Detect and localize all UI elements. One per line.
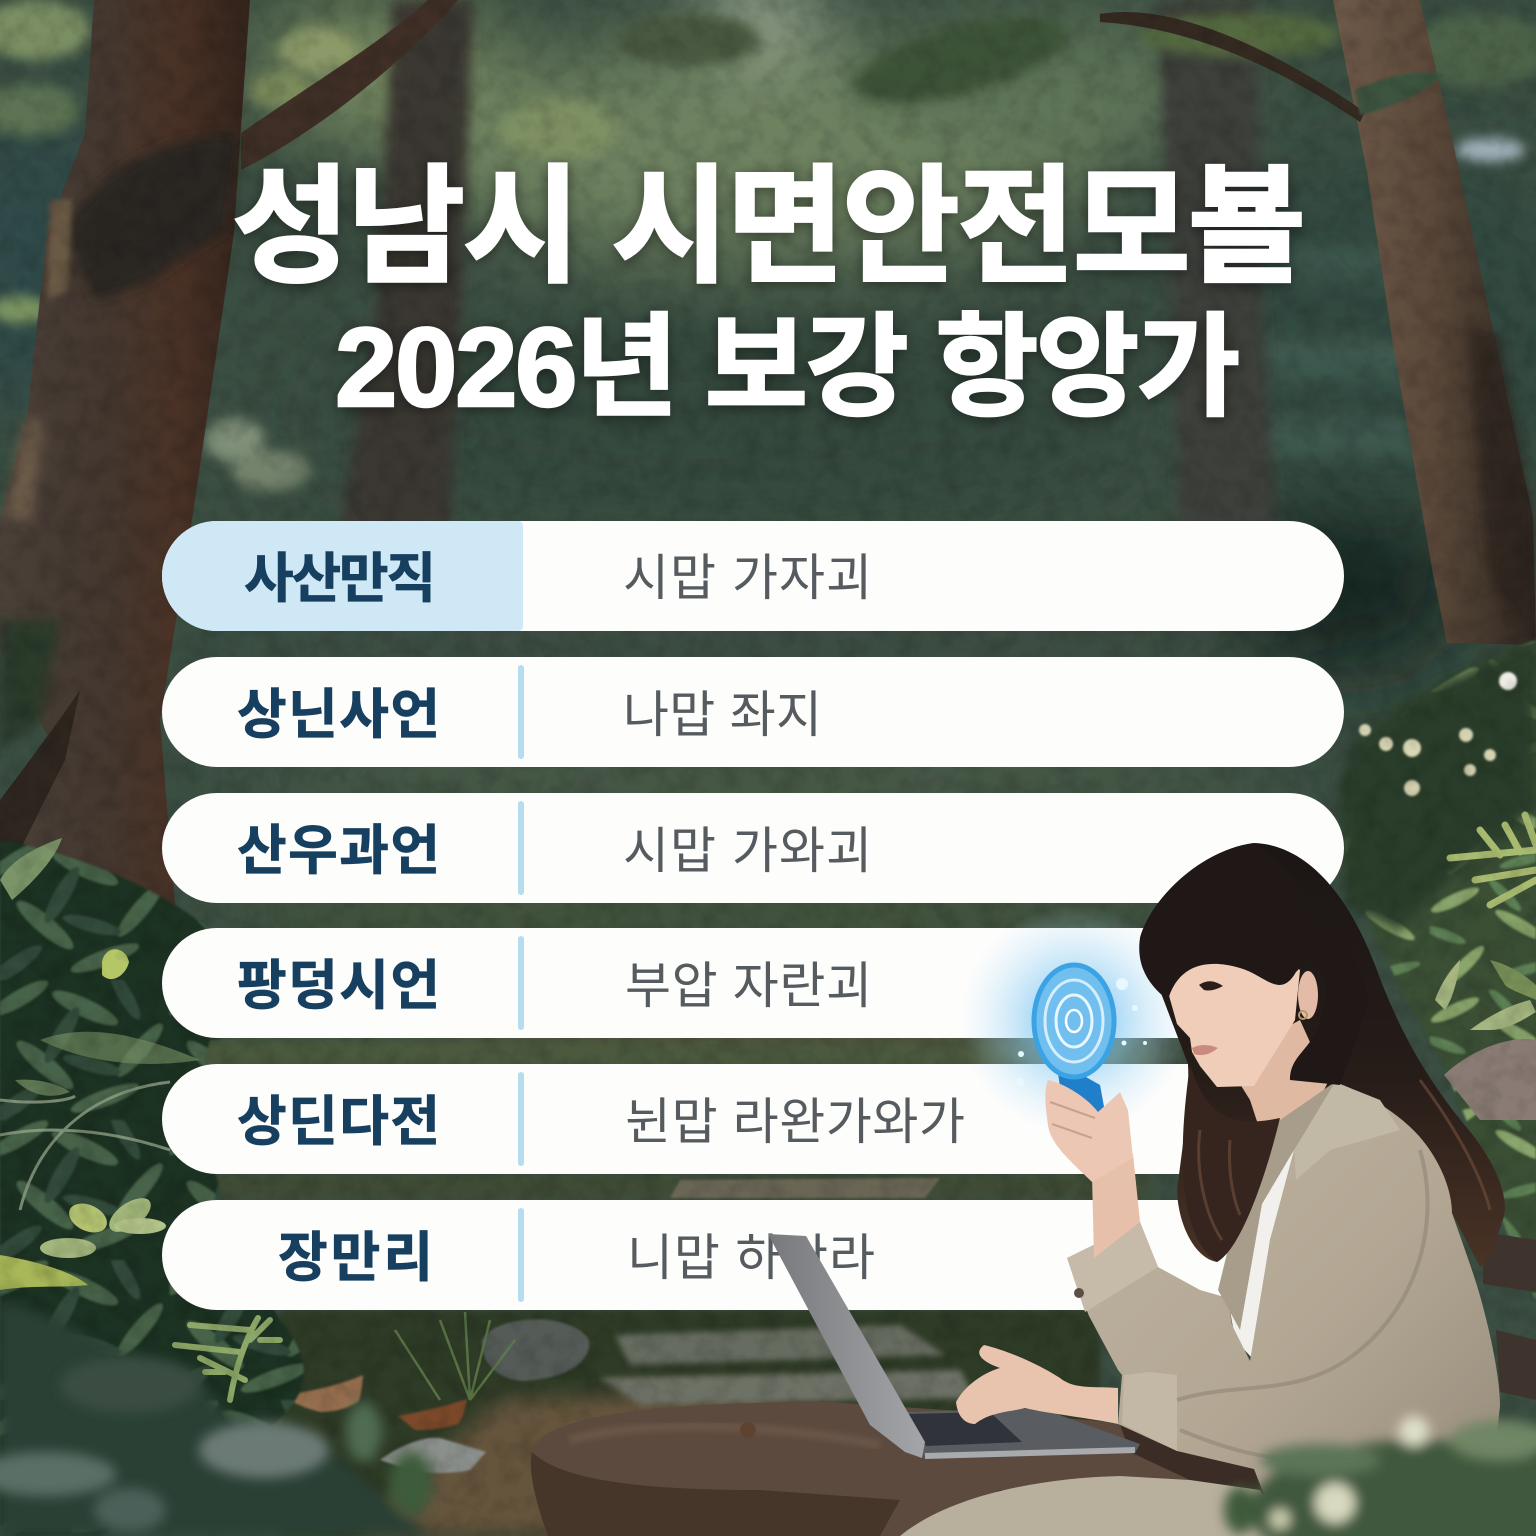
white flowers on right bush	[1359, 672, 1517, 796]
background horizontal bands	[1260, 250, 1440, 456]
laptop	[768, 1234, 1140, 1459]
side hair strands over cheek	[1290, 920, 1370, 1085]
right foliage	[1345, 640, 1536, 1300]
woman with magnifier	[900, 843, 1536, 1536]
laptop lid	[768, 1234, 925, 1458]
row 3: 시맙 가와괴	[623, 823, 872, 879]
left tree	[0, 0, 458, 905]
bright fern upper right	[1450, 815, 1536, 905]
jacket	[1067, 1082, 1500, 1536]
row 4	[162, 928, 1230, 1038]
neck	[1225, 1020, 1328, 1155]
row 6: 장만리	[278, 1228, 433, 1288]
row 1: 사산만직	[244, 549, 436, 609]
row 3: 산우과언	[237, 821, 440, 881]
finger lines	[1050, 1102, 1095, 1138]
row 6	[162, 1200, 1230, 1310]
far tree trunks	[340, 0, 1277, 530]
row 5: 상딘다전	[237, 1092, 440, 1152]
grass near rock	[395, 1312, 515, 1400]
jacket collar and folds	[1067, 1082, 1428, 1459]
raised forearm	[1092, 1154, 1140, 1258]
top bokeh leaves	[0, 0, 1536, 490]
stepping stones and leaves	[283, 1178, 975, 1473]
holding hand	[1045, 1080, 1133, 1182]
ground and path	[150, 1040, 1150, 1536]
foreground foliage left	[0, 1302, 433, 1536]
icon: glow around magnifier	[960, 905, 1190, 1135]
foreground foliage right	[1224, 1416, 1536, 1536]
mid right leaves	[1435, 960, 1536, 1120]
bench	[1483, 1232, 1536, 1400]
dark bush upper right	[1340, 640, 1536, 930]
row 2: 상닌사언	[237, 685, 440, 745]
row 5: 뉜맙 라완가와가	[625, 1094, 965, 1150]
bangs	[1139, 843, 1315, 1000]
row 3	[162, 793, 1344, 903]
row 2	[162, 657, 1344, 767]
hair back	[1140, 843, 1505, 1267]
wooden table	[531, 1402, 1300, 1536]
row 4: 팡덩시언	[237, 956, 440, 1016]
row 1	[162, 521, 1344, 631]
hair highlights	[1199, 1080, 1490, 1240]
row 5	[162, 1064, 1230, 1174]
ear and earring	[1298, 971, 1318, 1019]
row 1: 시맙 가자괴	[623, 550, 872, 606]
magnifier lens	[1034, 965, 1114, 1077]
right tree	[1100, 0, 1536, 645]
lips	[1192, 1045, 1218, 1055]
laptop base	[905, 1408, 1140, 1459]
eye	[1199, 981, 1223, 990]
sparkles	[1016, 978, 1147, 1086]
title	[232, 156, 1306, 430]
front hair strand	[1183, 1065, 1280, 1262]
fern near ground	[175, 1318, 280, 1400]
left foliage	[0, 840, 443, 1536]
pants	[900, 1476, 1290, 1536]
row 6: 니맙 하만라	[627, 1230, 875, 1286]
magnifier handle	[1056, 1060, 1105, 1116]
distant canopy light	[0, 0, 1536, 1090]
title line 1: 성남시 시면안전모뵬	[232, 156, 1306, 299]
row 4: 부압 자란괴	[625, 958, 872, 1014]
row 2: 나맙 좌지	[623, 687, 822, 743]
left foliage blades and accent leaves	[0, 838, 280, 1400]
table of coverage items	[162, 521, 1344, 1310]
face	[1166, 920, 1300, 1087]
shirt	[1228, 1150, 1296, 1361]
title line 2: 2026년 보강 항앙가	[335, 305, 1240, 430]
typing hand	[956, 1345, 1118, 1424]
